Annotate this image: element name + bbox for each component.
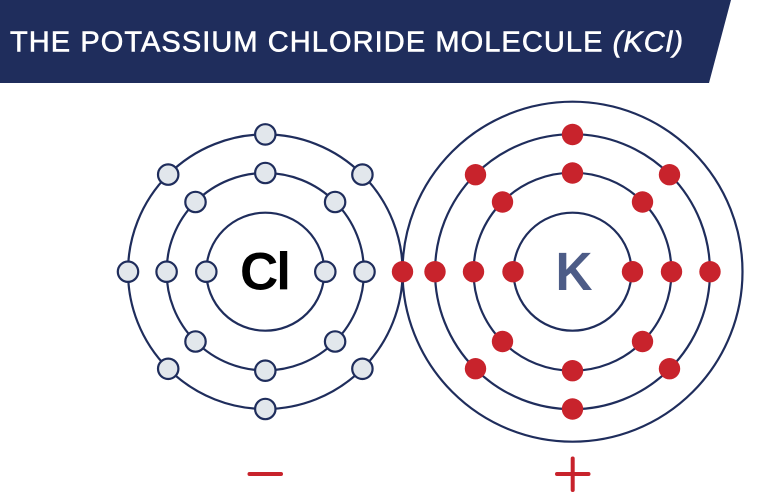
potassium atom <box>392 102 742 442</box>
chlorine electron shells <box>128 134 403 409</box>
title: THE POTASSIUM CHLORIDE MOLECULE (KCl) <box>10 26 683 58</box>
potassium electron shells <box>402 102 742 442</box>
plus sign <box>557 458 588 490</box>
potassium electrons <box>392 124 721 420</box>
chlorine symbol: Cl <box>240 242 291 302</box>
chlorine atom <box>118 124 403 419</box>
chlorine electrons <box>118 124 375 419</box>
title banner <box>0 0 731 83</box>
potassium symbol: K <box>556 242 592 302</box>
minus sign <box>250 472 281 476</box>
